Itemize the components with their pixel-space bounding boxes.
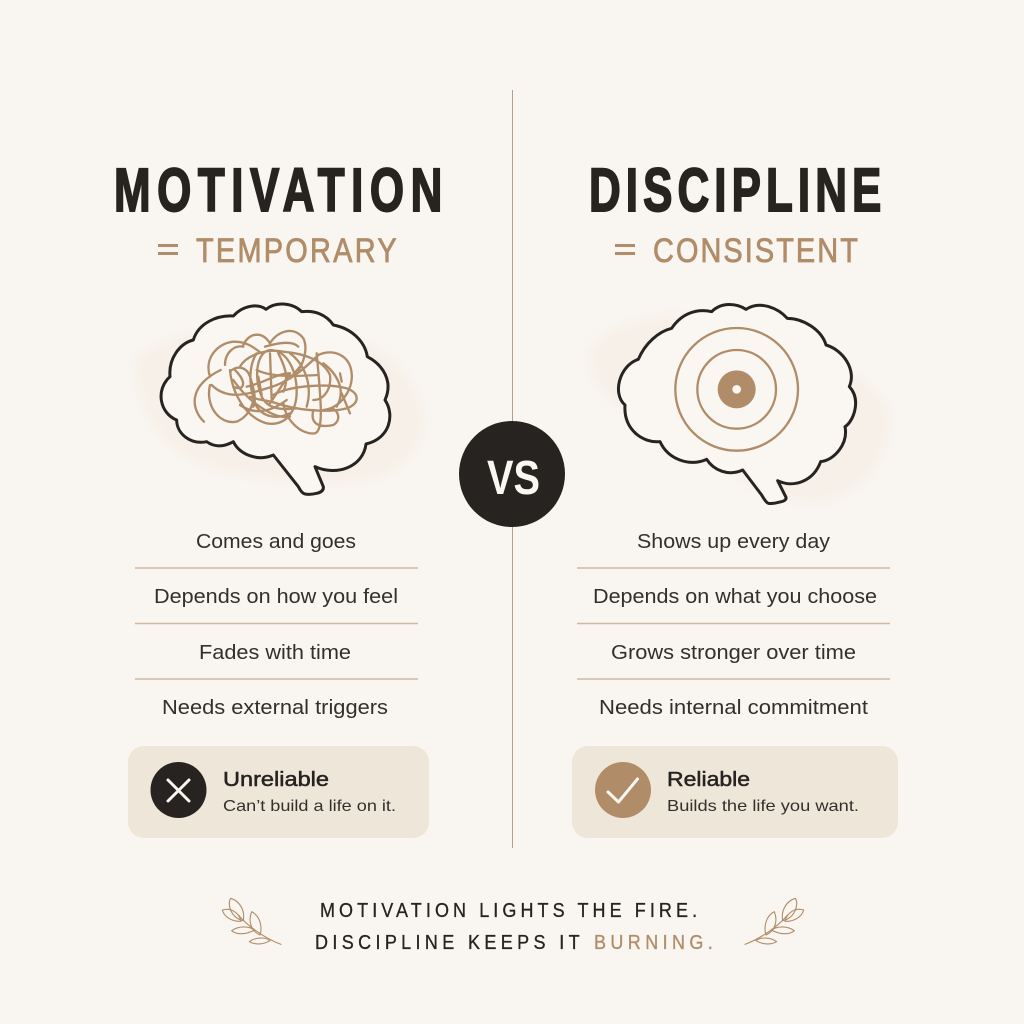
feature list: motivation: Comes and goes	[196, 531, 356, 553]
callout: unreliable	[128, 746, 429, 838]
badge: VS	[459, 421, 565, 527]
feature list: discipline: Needs internal commitment	[599, 697, 868, 719]
callout: reliable: Builds the life you want.	[667, 798, 859, 815]
icon: tangled brain	[135, 304, 425, 494]
subheading: consistent: CONSISTENT	[653, 231, 858, 270]
feature list: motivation: Needs external triggers	[162, 697, 388, 719]
callout: reliable	[572, 746, 898, 838]
callout: reliable: Reliable	[667, 769, 750, 791]
callout: unreliable: Can’t build a life on it.	[223, 798, 396, 815]
closing quote: MOTIVATION LIGHTS THE FIRE.	[320, 900, 697, 922]
callout: unreliable: Unreliable	[223, 769, 329, 791]
feature list: discipline: Depends on what you choose	[593, 586, 877, 608]
feature list: discipline	[577, 531, 890, 719]
panel: discipline	[572, 157, 898, 838]
badge: VS: VS	[487, 452, 540, 505]
feature list: motivation: Depends on how you feel	[154, 586, 398, 608]
feature list: discipline: Shows up every day	[637, 531, 830, 553]
feature list: motivation: Fades with time	[199, 642, 351, 664]
closing quote: BURNING.	[594, 932, 713, 954]
feature list: discipline: Grows stronger over time	[611, 642, 856, 664]
closing quote: DISCIPLINE KEEPS IT	[315, 932, 580, 954]
icon: focused brain	[590, 304, 890, 503]
panel: motivation	[114, 157, 442, 838]
icon: cross	[150, 762, 206, 818]
feature list: motivation	[135, 531, 418, 719]
heading: discipline: DISCIPLINE	[589, 157, 881, 225]
heading: motivation: MOTIVATION	[114, 157, 442, 225]
closing quote	[315, 900, 713, 954]
centre divider line	[512, 90, 514, 848]
icon: right laurel sprig	[745, 898, 804, 944]
icon: left laurel sprig	[222, 898, 281, 944]
subheading: temporary: TEMPORARY	[196, 231, 397, 270]
icon: check mark	[595, 762, 651, 818]
